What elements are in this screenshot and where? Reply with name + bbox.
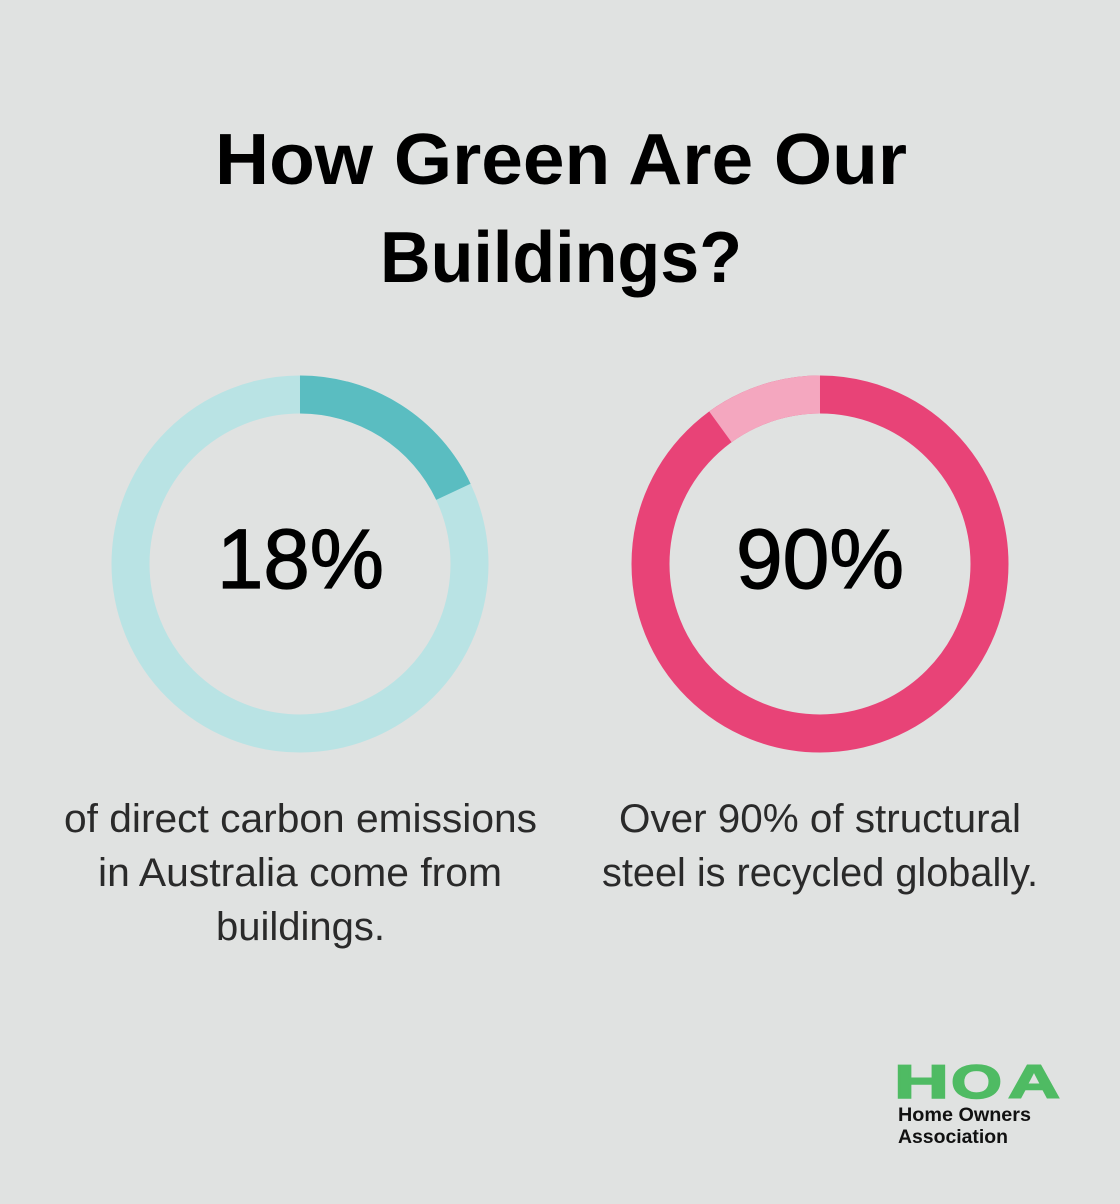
donut chart: 90% (650, 394, 990, 734)
value: 18%: 18% (217, 512, 384, 606)
logo: HOA: Home Owners (898, 1105, 1031, 1126)
title: Buildings? (380, 218, 742, 298)
caption: 90%: Over 90% of structural (619, 797, 1021, 841)
title: How Green Are Our (215, 120, 907, 200)
donut chart: 18% (130, 394, 470, 734)
logo: HOA: A (1008, 1055, 1060, 1108)
caption: 90% (602, 797, 1038, 895)
caption: 18%: buildings. (216, 905, 385, 949)
logo: HOA (894, 1055, 1060, 1148)
title (215, 120, 907, 298)
logo: HOA: H (894, 1055, 949, 1108)
caption: 18% (64, 797, 537, 949)
value: 90%: 90% (736, 512, 904, 606)
caption: 18%: of direct carbon emissions (64, 797, 537, 841)
caption: 90%: steel is recycled globally. (602, 851, 1038, 895)
logo: HOA: O (951, 1055, 1002, 1108)
caption: 18%: in Australia come from (98, 851, 502, 895)
logo: HOA: Association (898, 1127, 1008, 1148)
